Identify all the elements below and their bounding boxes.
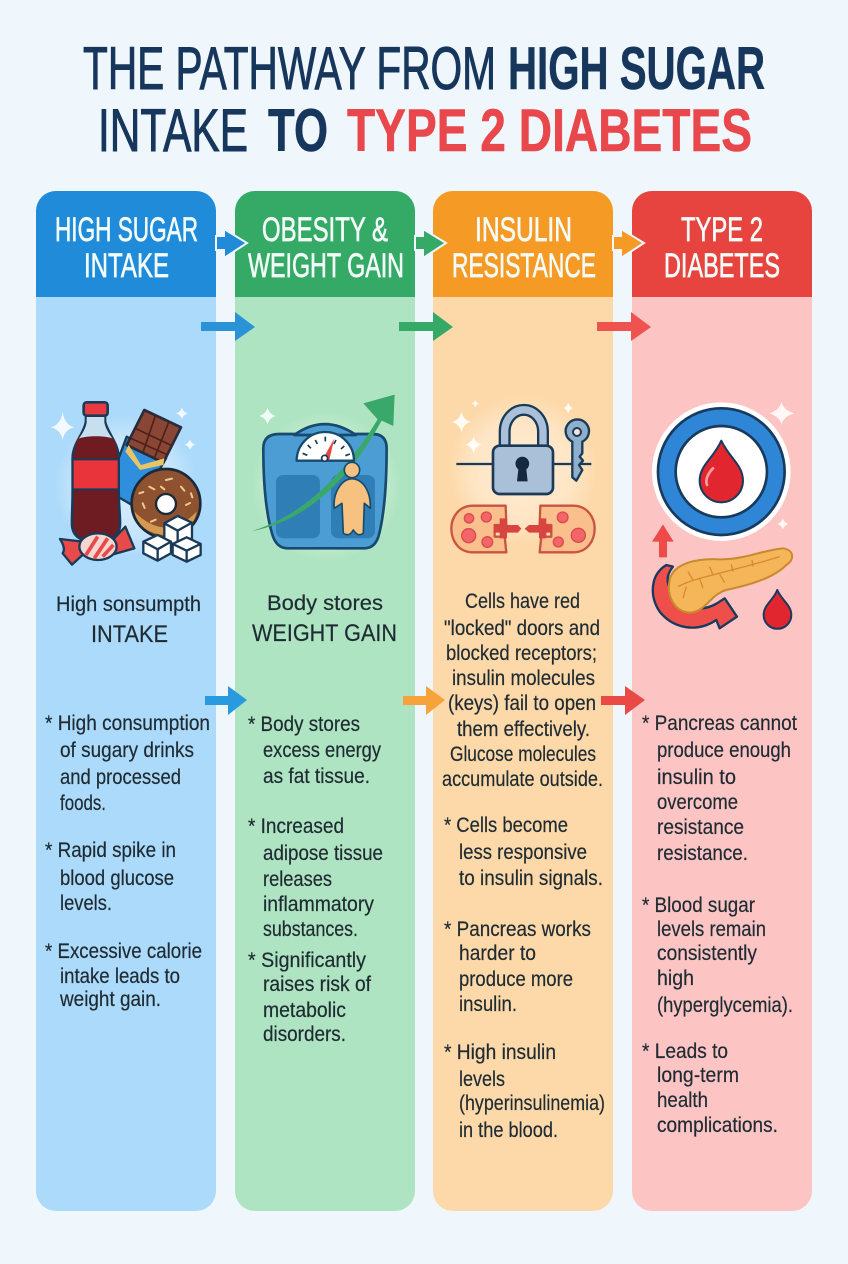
text: column 2 subheading: WEIGHT GAIN xyxy=(252,620,397,647)
text: column 2 bullets: adipose tissue xyxy=(263,842,383,865)
panel: type 2 diabetes xyxy=(632,191,812,1211)
text: column 2 bullets: excess energy xyxy=(263,739,381,762)
heading: obesity and weight gain xyxy=(248,211,404,285)
text: column 1 bullets: weight gain. xyxy=(59,988,161,1011)
arrow: upper blue xyxy=(201,312,255,341)
title: TO xyxy=(268,97,328,164)
text: column 1 bullets: * Rapid spike in xyxy=(45,839,176,862)
text: column 4 bullets: high xyxy=(657,967,694,990)
heading: type 2 diabetes: TYPE 2 xyxy=(681,211,763,249)
heading: obesity and weight gain: WEIGHT GAIN xyxy=(248,247,404,285)
icon: lock, key and cells xyxy=(448,395,598,552)
heading: type 2 diabetes xyxy=(664,211,780,285)
text: column 3 description xyxy=(442,590,603,791)
text: column 2 bullets: * Body stores xyxy=(248,713,360,736)
text: column 2 bullets: metabolic xyxy=(263,999,346,1022)
text: column 3 bullets: insulin. xyxy=(459,993,517,1016)
text: column 1 bullets: * Excessive calorie xyxy=(45,940,202,963)
text: column 4 bullets: resistance xyxy=(657,816,744,839)
panel: insulin resistance xyxy=(433,191,613,1211)
text: column 3 description: accumulate outside. xyxy=(442,768,603,791)
heading: high sugar intake xyxy=(55,211,198,285)
text: column 1 bullets: of sugary drinks xyxy=(60,739,194,762)
text: column 3 description: Cells have red xyxy=(465,590,580,613)
text: column 2 bullets: releases xyxy=(263,868,332,891)
icon: sugary foods xyxy=(51,402,201,565)
text: column 2 bullets: * Increased xyxy=(248,815,344,838)
text: column 2 subheading xyxy=(252,592,397,647)
text: column 2 bullets: disorders. xyxy=(263,1023,346,1046)
arrow: lower blue xyxy=(205,686,247,715)
text: column 3 bullets: harder to xyxy=(459,942,536,965)
text: column 4 bullets: overcome xyxy=(657,791,738,814)
text: column 2 bullets: inflammatory xyxy=(263,893,374,916)
text: column 4 bullets: complications. xyxy=(657,1114,778,1137)
arrow: upper red xyxy=(597,312,651,341)
text: column 3 description: Glucose molecules xyxy=(450,743,596,766)
heading: insulin resistance: RESISTANCE xyxy=(452,247,596,285)
text: column 3 bullets: to insulin signals. xyxy=(459,867,603,890)
heading: insulin resistance: INSULIN xyxy=(475,211,572,249)
text: column 3 bullets: * High insulin xyxy=(444,1041,556,1064)
text: column 3 description: blocked receptors; xyxy=(446,642,597,665)
text: column 4 bullets xyxy=(642,712,797,1137)
text: column 1 bullets xyxy=(45,712,210,1011)
text: column 3 bullets: less responsive xyxy=(459,841,587,864)
text: column 1 bullets: foods. xyxy=(60,792,106,815)
text: column 4 bullets: * Leads to xyxy=(642,1040,728,1063)
text: column 3 bullets: produce more xyxy=(459,968,573,991)
text: column 3 bullets: * Pancreas works xyxy=(444,918,591,941)
text: column 4 bullets: levels remain xyxy=(657,918,766,941)
heading: insulin resistance xyxy=(452,211,596,285)
icon: scale with rising arrow xyxy=(251,395,401,562)
text: column 1 bullets: levels. xyxy=(60,892,112,915)
text: column 4 bullets: (hyperglycemia). xyxy=(657,994,793,1017)
text: column 1 bullets: * High consumption xyxy=(45,712,210,735)
text: column 2 bullets: as fat tissue. xyxy=(263,765,370,788)
text: column 3 bullets: levels xyxy=(459,1068,505,1091)
text: column 1 bullets: blood glucose xyxy=(60,867,174,890)
text: column 4 bullets: health xyxy=(657,1089,708,1112)
text: column 1 subheading: INTAKE xyxy=(91,621,168,648)
text: column 3 description: (keys) fail to open xyxy=(448,692,596,715)
arrow: header blue xyxy=(216,229,247,258)
heading: obesity and weight gain: OBESITY & xyxy=(262,211,388,249)
text: column 1 subheading xyxy=(56,593,201,648)
text: column 3 description: them effectively. xyxy=(457,718,590,741)
text: column 4 bullets: produce enough xyxy=(657,739,791,762)
text: column 2 bullets: substances. xyxy=(263,918,358,941)
text: column 1 bullets: and processed xyxy=(60,766,181,789)
heading: type 2 diabetes: DIABETES xyxy=(664,247,780,285)
text: column 4 bullets: * Blood sugar xyxy=(642,894,755,917)
text: column 3 bullets: * Cells become xyxy=(444,814,568,837)
panel: obesity and weight gain xyxy=(235,191,415,1211)
text: column 2 bullets xyxy=(248,713,383,1046)
title: THE PATHWAY FROM xyxy=(83,35,496,102)
text: column 2 subheading: Body stores xyxy=(267,592,383,615)
text: column 4 bullets: consistently xyxy=(657,942,757,965)
arrow: header green xyxy=(415,229,446,258)
text: column 3 description: "locked" doors and xyxy=(444,617,600,640)
text: column 1 bullets: intake leads to xyxy=(60,965,180,988)
arrow: lower orange xyxy=(403,686,445,715)
text: column 4 bullets: long-term xyxy=(657,1064,739,1087)
title xyxy=(83,35,765,164)
panel: high sugar intake xyxy=(36,191,216,1211)
text: column 4 bullets: * Pancreas cannot xyxy=(642,712,797,735)
arrow: header orange xyxy=(613,229,644,258)
arrow: lower red xyxy=(601,686,645,715)
text: column 3 bullets: in the blood. xyxy=(459,1119,558,1142)
icon: blood drop and pancreas xyxy=(652,402,794,629)
text: column 1 subheading: High sonsumpth xyxy=(56,593,201,616)
text: column 3 description: insulin molecules xyxy=(452,667,595,690)
title: INTAKE xyxy=(98,97,248,164)
text: column 3 bullets xyxy=(444,814,605,1142)
text: column 2 bullets: * Significantly xyxy=(248,949,366,972)
text: column 3 bullets: (hyperinsulinemia) xyxy=(459,1092,605,1115)
text: column 2 bullets: raises risk of xyxy=(263,973,371,996)
heading: high sugar intake: INTAKE xyxy=(84,247,169,285)
text: column 4 bullets: insulin to xyxy=(657,766,736,789)
text: column 4 bullets: resistance. xyxy=(657,842,748,865)
heading: high sugar intake: HIGH SUGAR xyxy=(55,211,198,249)
arrow: upper green xyxy=(399,312,453,341)
